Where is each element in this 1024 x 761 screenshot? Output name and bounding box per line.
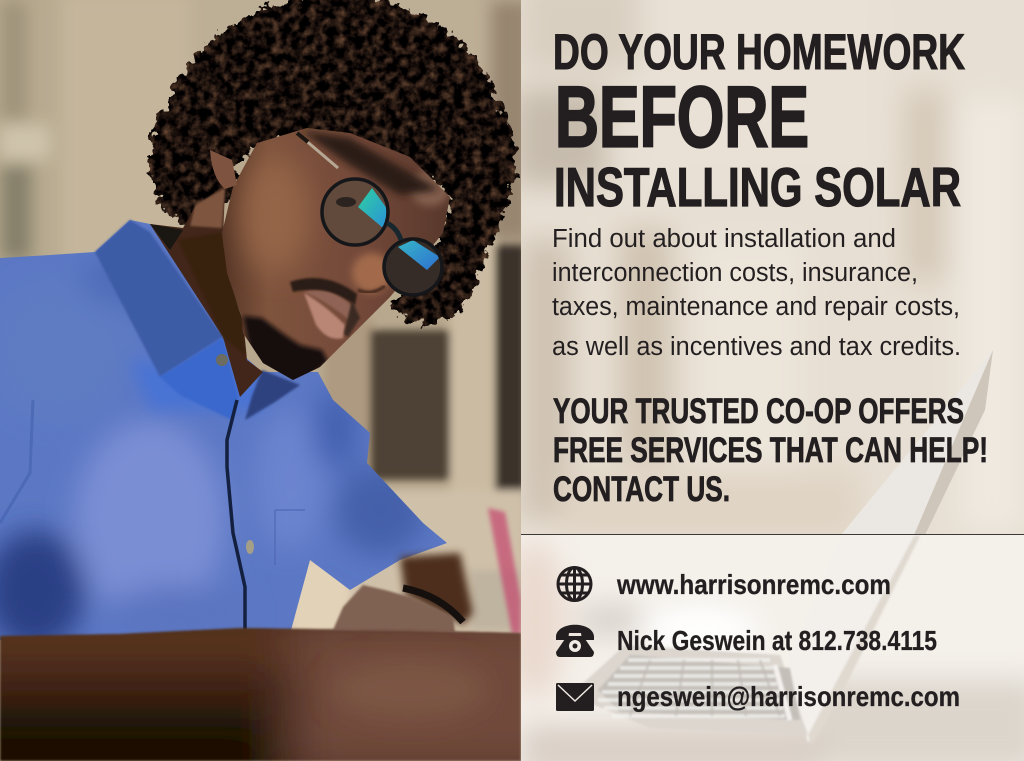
heading [553, 24, 965, 218]
laptop screen [842, 390, 960, 534]
shirt [0, 210, 460, 650]
call to action [553, 392, 988, 509]
website: www.harrisonremc.com [616, 569, 891, 600]
body text [552, 225, 961, 361]
neck [150, 185, 263, 397]
divider [521, 534, 1024, 535]
body text: interconnection costs, insurance, [552, 259, 918, 287]
ear [210, 150, 237, 189]
contact area background [521, 535, 1024, 761]
body text: as well as incentives and tax credits. [552, 333, 961, 361]
body text: Find out about installation and [552, 225, 896, 253]
body text: taxes, maintenance and repair costs, [552, 293, 960, 321]
heading: BEFORE [555, 70, 809, 166]
glasses [297, 133, 442, 295]
icon: telephone [556, 625, 594, 657]
icon: envelope [556, 683, 594, 711]
email: ngeswein@harrisonremc.com [617, 681, 960, 712]
contact name: Nick Geswein at 812.738.4115 [617, 625, 937, 656]
collar [0, 220, 305, 630]
wrist and hand [333, 553, 473, 632]
panel: text panel [505, 0, 1024, 761]
hair [150, 0, 515, 324]
photo: student at laptop [0, 0, 570, 761]
foreground arm [0, 626, 521, 761]
face [215, 125, 455, 386]
laptop [570, 536, 920, 745]
icon: globe [558, 567, 591, 601]
call to action: CONTACT US. [553, 470, 730, 509]
